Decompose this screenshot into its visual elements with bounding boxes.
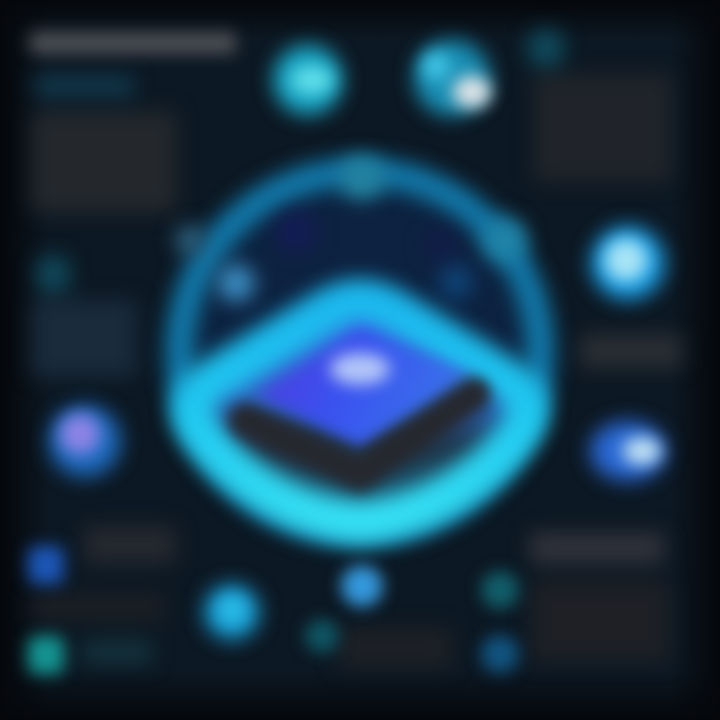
big ring [180,172,540,532]
icon: teal square lower left [28,636,64,674]
orb: right lower [590,421,666,481]
platform: dark base [246,394,474,474]
platform: blue top [256,326,474,448]
orb: bottom centre [341,565,383,607]
panel: right middle text [580,334,682,368]
platform: white glow [330,353,390,385]
orb: right upper [591,226,665,300]
title [30,32,236,54]
orb: left [49,405,121,477]
panel: bottom middle text [338,628,452,668]
icon: blue square lower left [28,546,64,584]
orb: top left [273,45,343,115]
panel: right top text [528,30,672,182]
orb: bottom left [204,584,260,640]
panel: left lower text [32,526,176,664]
panel: left top text [32,76,176,212]
thick cyan rounded diamond [193,300,527,522]
panel: left middle text [32,256,136,376]
icon: small teal bottom [305,619,339,653]
icon: blue right of bottom [481,635,519,673]
ring inner nodes [175,156,527,302]
icon: teal right of bottom [481,571,519,609]
panel: right lower text [530,532,670,662]
orb: top right [414,40,491,116]
